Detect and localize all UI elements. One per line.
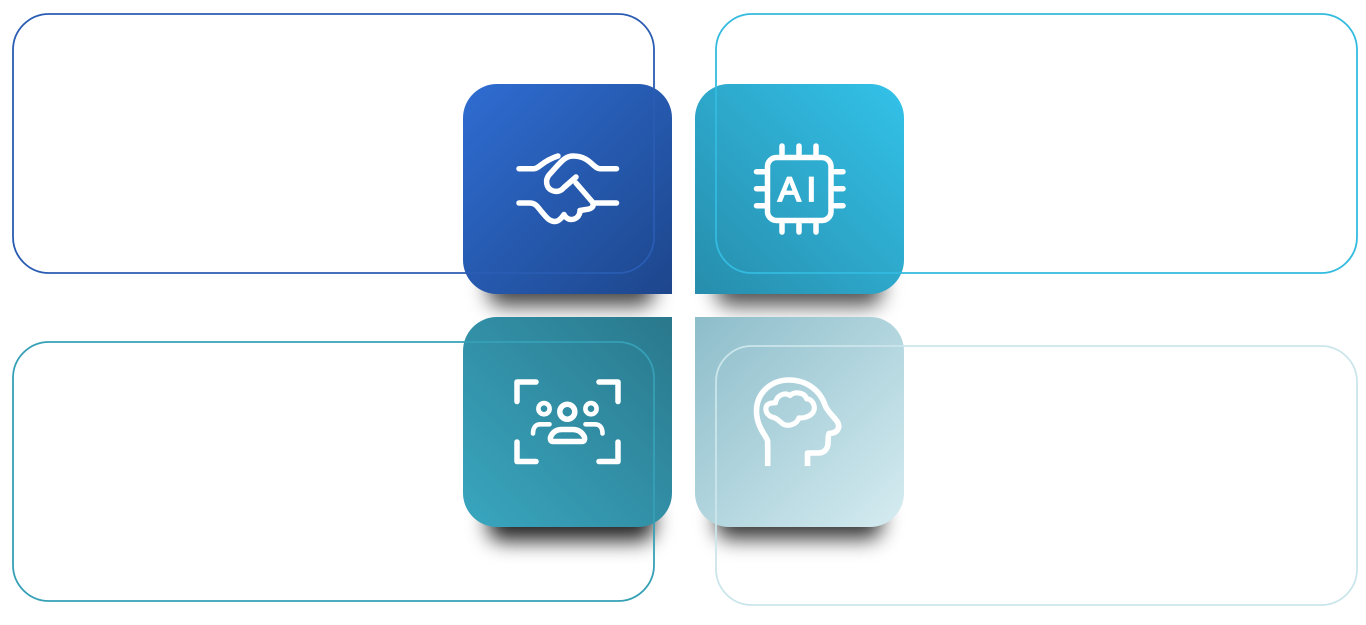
panel: top-left blue tile (463, 84, 672, 294)
panel: bottom-left tile shadow (488, 501, 654, 541)
panel: bottom-left outline box (13, 342, 654, 601)
panel: top-right tile shadow (716, 268, 882, 306)
label: AI: AI (778, 171, 822, 209)
panel: top-left tile shadow (488, 268, 654, 306)
icon: group of people in focus brackets (517, 382, 618, 462)
panel: bottom-right pale tile (695, 317, 904, 527)
panel: bottom-right tile shadow (716, 501, 882, 539)
icon: head with brain (756, 380, 839, 466)
panel: top-right cyan tile (695, 84, 904, 294)
panel: top-right outline box (716, 14, 1357, 273)
icon: handshake (519, 156, 616, 222)
panel: bottom-left teal tile (463, 317, 672, 527)
panel: bottom-right outline box (716, 346, 1357, 605)
panel: top-left outline box (13, 14, 654, 273)
icon: AI chip (756, 146, 843, 232)
